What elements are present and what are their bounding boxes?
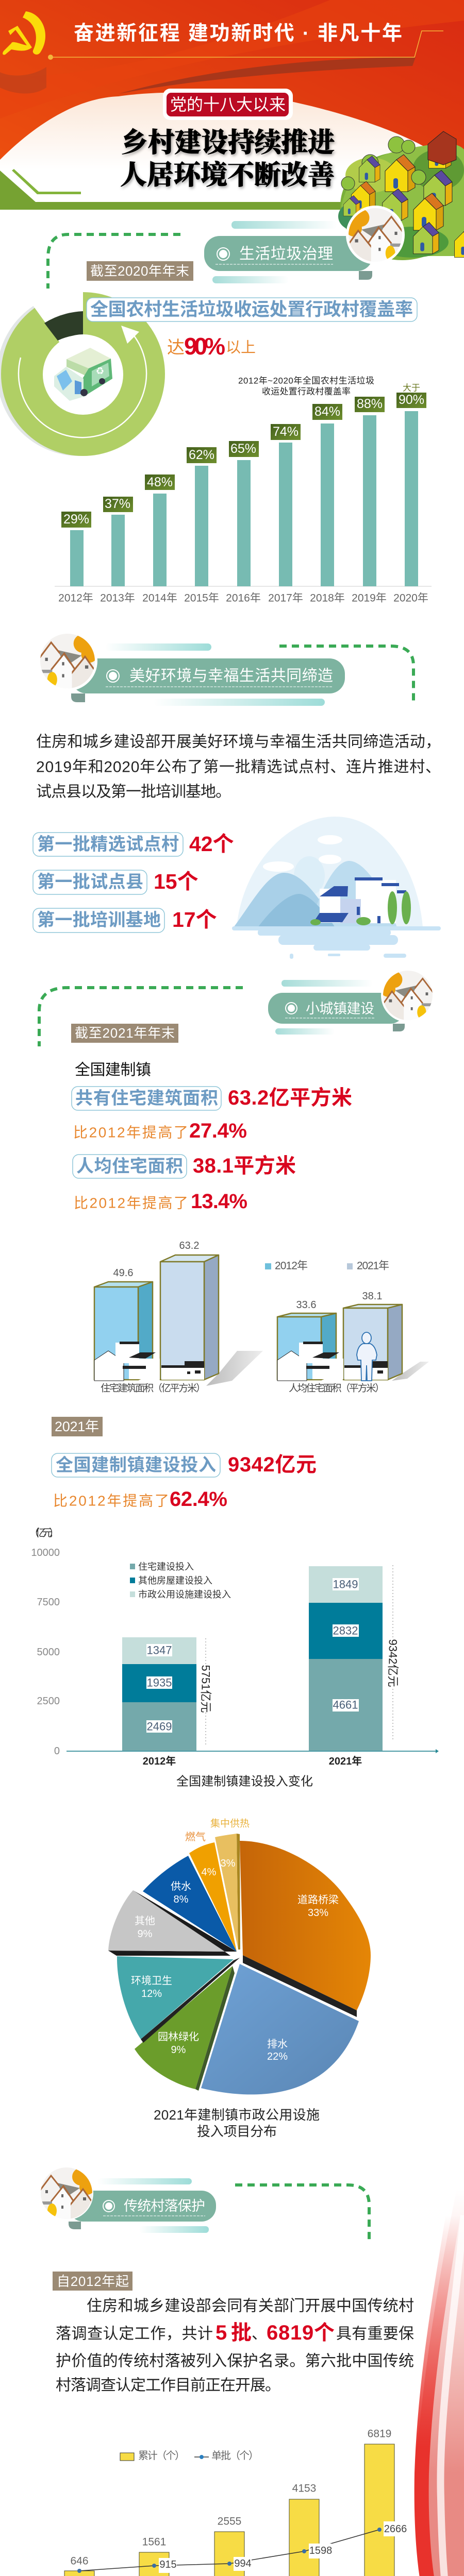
paragraph: traditional village protection [56,2298,414,2394]
slice: drainage: 排水 [267,2038,288,2050]
slice: central heating: 集中供热 [210,1818,250,1829]
icon: garbage truck [54,348,112,401]
decorative red ribbon on the right [415,2154,464,2576]
stat: investment growth: 62.4% [170,1488,227,1511]
slice: other [108,1890,237,1956]
tag: end of 2021: 截至2021年年末 [75,1025,175,1041]
chart: traditional village batches: 6819 [368,2428,391,2440]
chart: traditional village batches: 915 [159,2559,177,2570]
bar chart: waste coverage 2012-2020: 2012年 [58,592,93,604]
slice: drainage: 22% [267,2051,288,2062]
section heading: household waste [204,206,406,283]
paragraph: traditional village protection: 6819个 [267,2321,335,2344]
village silhouettes [94,1342,388,1383]
header background [0,0,464,222]
stat: selected pilot villages: 42个 [189,832,234,856]
bar chart: waste coverage 2012-2020: 2016年 [226,592,261,604]
stat: training bases: 第一批培训基地 [37,910,161,930]
chart: traditional village batches: 4153 [292,2482,316,2495]
stat: per capita growth [74,1190,247,1213]
y axis labels: 0 [54,1745,60,1757]
slice: water supply: 8% [174,1894,189,1905]
chart: investment stacked bars: 2832 [333,1624,358,1637]
paragraph: traditional village protection: 护价值的传统村落被列入保护名录。第六批中国传统 [56,2352,414,2370]
main title: 乡村建设持续推进 [121,128,335,158]
data values [113,1240,382,1311]
stat: pilot counties: 第一批试点县 [37,872,143,892]
slice: landscaping: 园林绿化 [158,2031,199,2043]
stat: total residential floor area: 共有住宅建筑面积 [75,1089,218,1108]
legend: 2012年 [275,1260,308,1272]
section heading: beautiful environment: 美好环境与幸福生活共同缔造 [129,668,333,684]
chart title: pie caption: 投入项目分布 [197,2124,277,2139]
stat: training bases [33,908,217,933]
y axis labels: 7500 [37,1597,60,1608]
bar chart: waste coverage 2012-2020: 2018年 [310,592,345,604]
data values: 38.1 [362,1291,382,1302]
slice: roads and bridges [240,1841,371,2017]
stat: floor area growth [73,1120,247,1142]
slice: roads and bridges: 道路桥梁 [297,1894,339,1906]
section heading: traditional villages: 传统村落保护 [124,2198,205,2214]
paragraph: traditional village protection: 落调查认定工作，共计 [56,2326,213,2342]
water reflections [232,926,441,959]
chart: traditional village batches: 646 [70,2555,89,2567]
blue box: coverage rate heading: 全国农村生活垃圾收运处置行政村覆盖率 [90,300,413,319]
bar chart: waste coverage 2012-2020: 74% [273,425,299,439]
slice: water supply: 供水 [171,1880,191,1892]
slice: gas: 燃气 [185,1831,206,1843]
bar chart: waste coverage 2012-2020: 2014年 [142,592,177,604]
chart: investment stacked bars: 1347 [147,1643,172,1657]
badge: since the 18th CPC congress [163,89,293,120]
bar chart: waste coverage 2012-2020: 90% [399,393,424,407]
chart: investment stacked bars: 2021年 [329,1755,362,1767]
slice: landscaping [135,1966,235,2091]
icon: hui-style house [310,877,411,925]
chart: municipal investment pie [108,1818,371,2094]
legend [120,2450,259,2462]
bar chart: waste coverage 2012-2020: 84% [314,404,340,419]
paragraph: traditional village protection: 、 [252,2326,267,2342]
chart title [238,376,374,397]
slice: central heating: 3% [221,1858,236,1869]
slice: sanitation [117,1956,240,2043]
slice: drainage [201,1964,359,2094]
stat: per capita floor area: 人均住宅面积 [76,1157,183,1176]
tag: 2021 [52,1417,103,1436]
badge: since the 18th CPC congress: 党的十八大以来 [170,95,286,114]
y axis labels: 10000 [31,1547,60,1558]
icon: garbage truck: ♻ [96,367,104,375]
y axis labels: 5000 [37,1647,60,1658]
legend [130,1562,231,1600]
bar chart: waste coverage 2012-2020: 2020年 [393,592,428,604]
chart: investment stacked bars: 2469 [147,1720,172,1733]
stat: per capita growth: 13.4% [191,1190,247,1213]
slice: sanitation: 12% [141,1988,162,1999]
paragraph: traditional village protection: 具有重要保 [336,2326,414,2342]
stat: construction investment: 全国建制镇建设投入 [56,1455,216,1475]
slice: sanitation: 环境卫生 [131,1975,172,1987]
chart title: 2012年~2020年全国农村生活垃圾 [238,376,374,385]
slice: other: 其他 [135,1915,155,1927]
legend: 累计（个） [138,2450,185,2462]
stat: per capita floor area [73,1155,296,1178]
data values: 63.2 [179,1240,199,1251]
stat: total residential floor area [72,1087,352,1110]
chart: investment stacked bars: 1849 [333,1578,358,1591]
bar chart: waste coverage 2012-2020: 62% [189,448,214,462]
stat: per capita floor area: 38.1平方米 [193,1155,296,1177]
stat: selected pilot villages [33,832,234,856]
section heading: small towns [268,969,437,1035]
ribbon line [48,31,443,60]
main title [120,128,335,191]
stat: floor area growth: 比2012年提高了 [73,1124,188,1141]
stat: pilot counties [33,870,198,894]
axis captions: 人均住宅面积（平方米） [289,1383,385,1394]
stat: construction investment: 9342亿元 [228,1453,317,1476]
bar chart: waste coverage 2012-2020: 29% [63,512,89,527]
chart: traditional village batches: 1598 [309,2545,332,2556]
chart: 90 percent donut with truck [0,289,165,456]
y axis labels [31,1547,60,1757]
slice: gas [185,1831,237,1952]
section heading: household waste: 生活垃圾治理 [239,245,333,263]
paragraph: traditional village protection: 5批 [216,2321,252,2344]
paragraph: traditional village protection: 住房和城乡建设部会同有关部门开展中国传统村 [87,2298,414,2314]
bar chart: waste coverage 2012-2020: 2015年 [184,592,219,604]
paragraph: joint creation activity: 住房和城乡建设部开展美好环境与幸福生活共同缔造活动， [36,734,441,750]
chart: investment stacked bars: 9342亿元 [387,1639,399,1687]
chart: traditional village batches [41,2428,417,2576]
icon: party emblem [3,11,45,55]
chart: investment stacked bars: 2012年 [143,1755,176,1767]
chart title: pie caption: 2021年建制镇市政公用设施 [154,2107,320,2123]
y axis labels: 2500 [37,1696,60,1707]
legend: 住宅建设投入 [138,1562,194,1572]
section heading: small towns: 小城镇建设 [306,1001,374,1016]
top banner title: 奋进新征程 建功新时代 · 非凡十年 [74,23,402,44]
legend: 2021年 [357,1260,389,1272]
slice: landscaping: 9% [171,2044,186,2056]
paragraph: joint creation activity: 试点县以及第一批培训基地。 [36,783,231,801]
bar chart: waste coverage 2012-2020: 37% [105,497,130,511]
bar chart: waste coverage 2012-2020: 65% [230,442,256,456]
stat: floor area growth: 27.4% [189,1120,247,1142]
slice: gas: 4% [202,1867,217,1878]
chart: investment stacked bars: 1935 [147,1676,172,1689]
bar chart: waste coverage 2012-2020: 88% [357,397,383,411]
slice: water supply [143,1856,237,1952]
stat: pilot counties: 15个 [154,870,198,893]
bar chart: waste coverage 2012-2020: 2017年 [268,592,303,604]
callout: above 90 percent: 90% [184,333,225,360]
chart: traditional village batches: 994 [234,2558,252,2569]
chart: investment stacked bars: （亿元） [29,1527,59,1539]
bar chart: waste coverage 2012-2020: 2019年 [352,592,387,604]
stat: investment growth: 比2012年提高了 [53,1493,169,1509]
axis captions [101,1383,385,1394]
icon: person [357,1332,377,1381]
illustration: mountain and water village [232,817,441,959]
slice: central heating [210,1818,250,1950]
chart: 3D residential area bars [94,1240,429,1394]
text: towns nationwide: 全国建制镇 [75,1061,151,1079]
legend: 其他房屋建设投入 [138,1575,212,1586]
callout: above 90 percent: 达 [167,338,185,358]
bar chart: waste coverage 2012-2020: 48% [147,475,173,489]
slice: other: 9% [138,1928,153,1940]
main title: 人居环境不断改善 [120,161,335,191]
section heading: traditional villages [37,2166,216,2233]
axis captions: 住宅建筑面积（亿平方米） [101,1383,206,1394]
chart: traditional village batches: 2555 [218,2515,241,2528]
bar chart: waste coverage 2012-2020 [55,376,432,604]
legend: 市政公用设施建设投入 [138,1589,231,1600]
data values: 49.6 [113,1267,133,1279]
illustration: hillside village [338,131,464,260]
paragraph: joint creation activity: 2019年和2020年公布了第一批精选试点村、连片推进村、 [36,758,441,776]
bar chart: waste coverage 2012-2020: 2013年 [100,592,135,604]
chart: investment stacked bars: 5751亿元 [199,1665,212,1713]
chart: investment stacked bars [29,1527,439,1767]
stat: investment growth [53,1488,227,1511]
chart title: pie caption [154,2107,320,2139]
section heading: beautiful environment [36,631,345,706]
tag: 2021: 2021年 [55,1419,99,1434]
paragraph: joint creation activity [36,734,441,801]
stat: per capita growth: 比2012年提高了 [74,1195,188,1211]
chart: traditional village batches: 1561 [142,2536,166,2548]
legend [265,1260,389,1272]
paragraph: traditional village protection: 村落调查认定工作目前正在开展。 [56,2377,280,2394]
chart: investment stacked bars: 4661 [333,1698,358,1711]
stat: total residential floor area: 63.2亿平方米 [228,1087,352,1109]
stat: selected pilot villages: 第一批精选试点村 [37,835,179,854]
legend: 单批（个） [211,2450,259,2462]
tag: since 2012: 自2012年起 [57,2274,129,2289]
callout: above 90 percent: 以上 [226,340,256,356]
stat: construction investment [52,1453,317,1477]
callout: above 90 percent [167,333,256,360]
chart: traditional village batches: 2666 [384,2523,407,2535]
tag: end of 2020: 截至2020年年末 [90,263,189,279]
chart title: 收运处置行政村覆盖率 [262,386,351,397]
chart title: investment change: 全国建制镇建设投入变化 [176,1774,313,1789]
slice: roads and bridges: 33% [308,1907,328,1919]
data values: 33.6 [296,1299,316,1311]
bar chart: waste coverage 2012-2020: 大于 [403,383,420,393]
stat: training bases: 17个 [172,908,217,931]
